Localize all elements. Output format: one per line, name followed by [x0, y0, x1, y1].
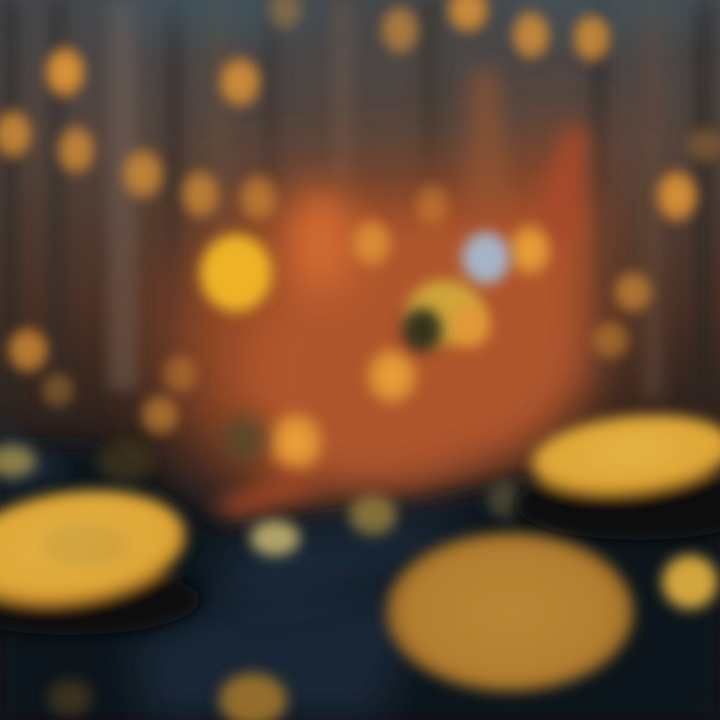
vertical forest-like stripes [0, 0, 714, 430]
small coins in foreground [0, 442, 718, 720]
blue-grey top haze [100, 0, 720, 35]
dark and yellow centre coin [223, 280, 490, 462]
blue-white orb [462, 232, 510, 284]
central orange glow [170, 70, 590, 495]
bokeh dots [0, 0, 720, 479]
large coin: left [0, 477, 200, 635]
large coin: centre bottom [386, 532, 634, 692]
dark navy foreground [0, 425, 720, 720]
large coin: right [515, 406, 720, 540]
large bright coin [200, 234, 272, 312]
